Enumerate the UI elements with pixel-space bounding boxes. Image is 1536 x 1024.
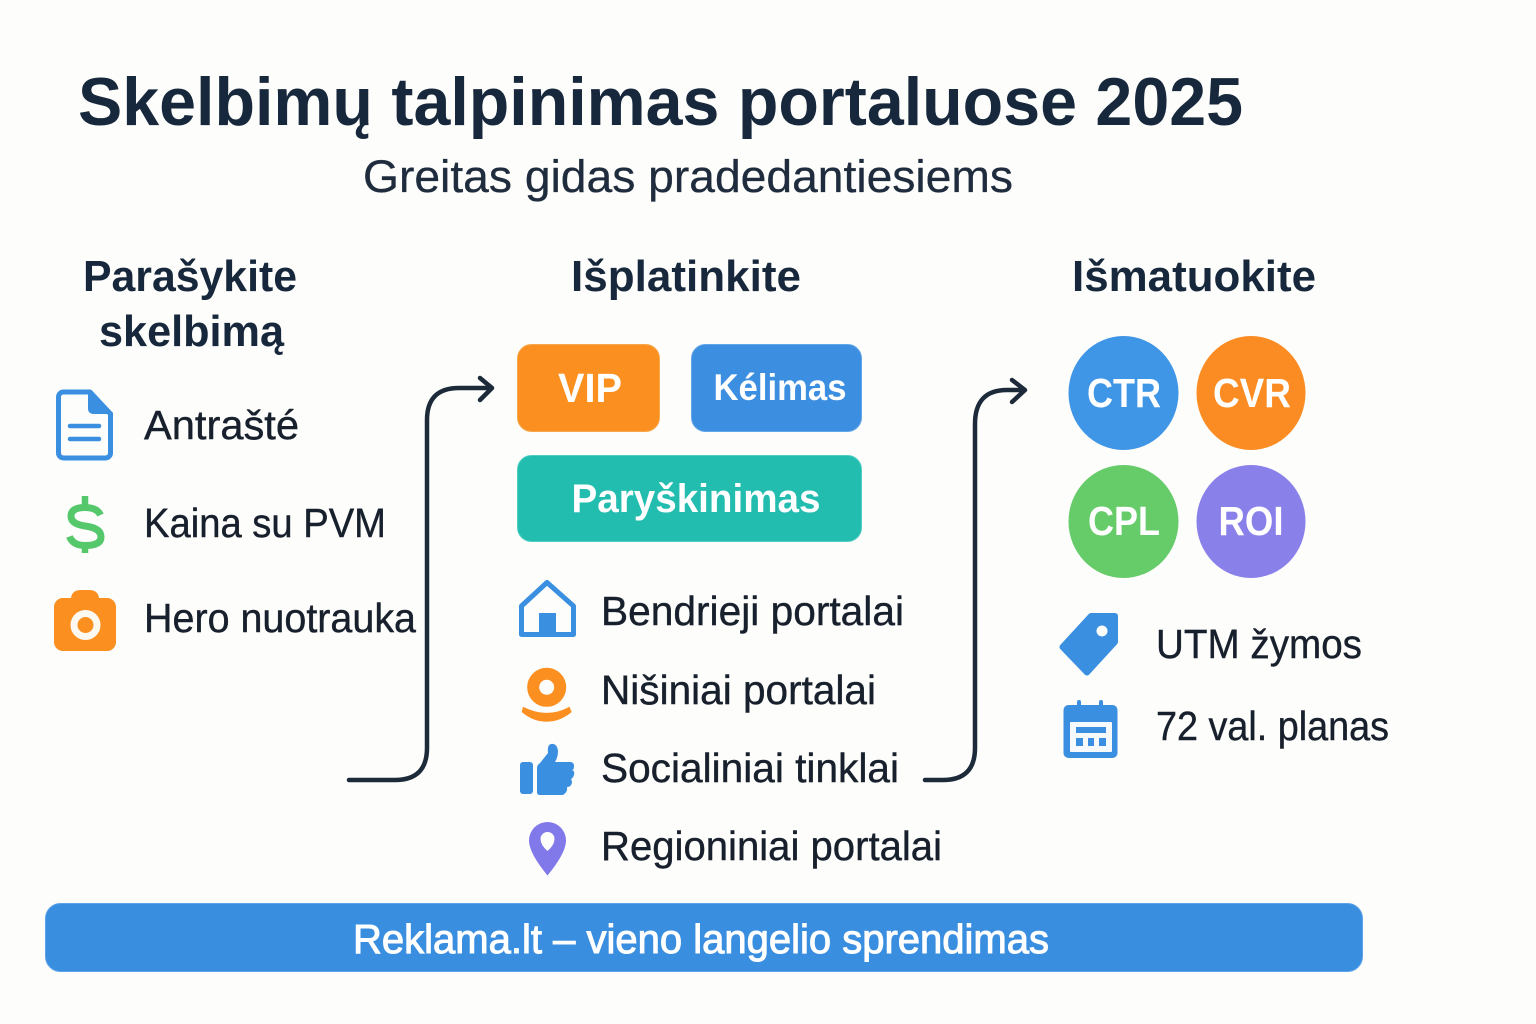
badge: VIP: VIP <box>558 365 622 411</box>
icon: camera <box>54 590 116 651</box>
icon: map pin <box>529 822 566 876</box>
text: niche portals: Nišiniai portalai <box>601 667 876 713</box>
icon: niche portal <box>522 674 572 722</box>
panel: distribute <box>518 252 942 876</box>
arrow: distribute to measure <box>925 380 1025 780</box>
title: Skelbimų talpinimas portaluose 2025 <box>78 64 1243 140</box>
heading: write the ad <box>83 252 297 356</box>
text: regional portals: Regioniniai portalai <box>601 823 942 869</box>
icon: document <box>58 390 113 458</box>
icon: tag <box>1062 616 1115 672</box>
footer banner: Reklama.lt – vieno langelio sprendimas <box>353 916 1049 962</box>
heading: measure: Išmatuokite <box>1072 252 1316 301</box>
metric: ROI <box>1196 465 1306 578</box>
badge: boost: Kélimas <box>714 367 846 408</box>
metric: CTR: CTR <box>1087 370 1161 416</box>
icon: dollar <box>70 496 101 553</box>
badge: highlight: Paryškinimas <box>572 477 820 521</box>
metric: CPL: CPL <box>1088 498 1160 544</box>
panel: write the ad <box>54 252 416 651</box>
text: general portals: Bendrieji portalai <box>601 588 904 634</box>
heading: distribute: Išplatinkite <box>571 252 801 301</box>
heading: write the ad: Parašykite <box>83 252 297 301</box>
text: social networks: Socialiniai tinklai <box>601 745 899 791</box>
text: headline: Antrašté <box>144 402 299 448</box>
icon: thumbs up <box>520 744 574 795</box>
badge: boost <box>692 344 862 432</box>
metric: CVR: CVR <box>1213 370 1291 416</box>
text: price with VAT: Kaina su PVM <box>144 500 386 546</box>
badge: highlight <box>518 456 862 542</box>
arrow: write to distribute <box>349 378 492 780</box>
text: UTM tags: UTM žymos <box>1156 621 1362 667</box>
metric: CVR <box>1196 336 1306 450</box>
metric: CTR <box>1068 336 1178 450</box>
metric: ROI: ROI <box>1218 498 1284 544</box>
text: 72-hour plan: 72 val. planas <box>1156 703 1389 749</box>
metric: CPL <box>1068 465 1178 578</box>
heading: write the ad: skelbimą <box>99 307 285 356</box>
icon: house <box>522 582 574 635</box>
text: hero photo: Hero nuotrauka <box>144 595 416 641</box>
icon: calendar <box>1064 700 1118 758</box>
panel: measure <box>1062 252 1389 758</box>
subtitle: Greitas gidas pradedantiesiems <box>363 151 1013 202</box>
badge: VIP <box>518 344 660 432</box>
footer banner <box>46 904 1362 972</box>
